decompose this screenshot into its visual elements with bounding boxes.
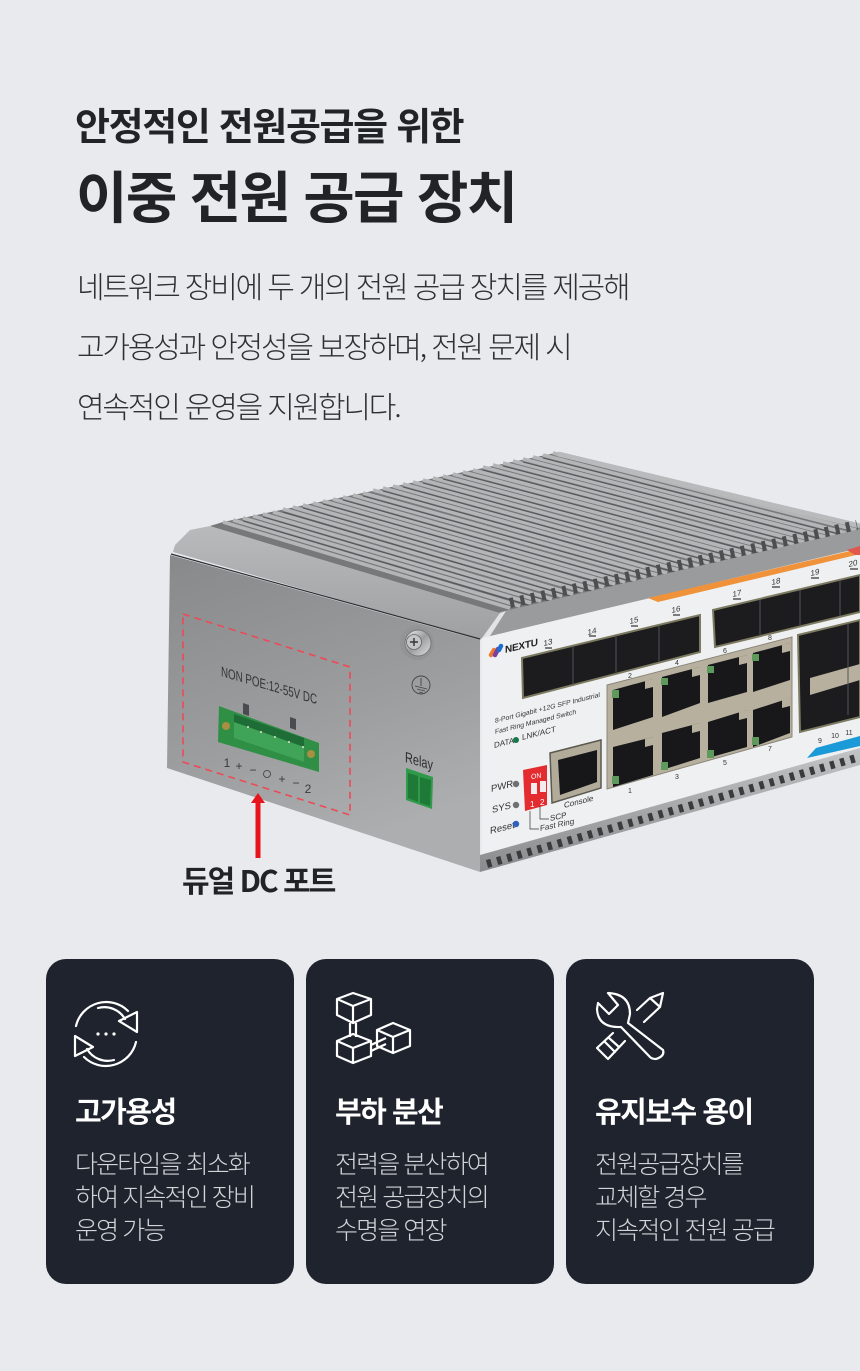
SFP ports 13-16: 16 bbox=[672, 604, 681, 615]
SFP ports 9-12 block: 10 bbox=[831, 733, 839, 740]
text: load balancing: 전력을 분산하여 bbox=[335, 1145, 488, 1181]
terminal labels: + bbox=[235, 759, 243, 773]
RJ45 port block: 1 bbox=[628, 788, 632, 795]
status LEDs: SYS bbox=[492, 800, 511, 816]
voltage label: NON POE:12-55V DC bbox=[221, 664, 317, 708]
DIP switch: ON bbox=[531, 773, 541, 781]
bottom vent strip bbox=[480, 748, 860, 872]
grounding screw bbox=[400, 626, 434, 660]
icon: connected cubes bbox=[336, 992, 412, 1064]
SFP ports 13-16: 14 bbox=[588, 626, 597, 637]
model text: Fast Ring Managed Switch bbox=[495, 709, 576, 736]
RJ45 port block: 3 bbox=[675, 774, 679, 781]
text: load balancing: 전원 공급장치의 bbox=[335, 1178, 488, 1214]
DIP switch: 2 bbox=[540, 798, 545, 807]
terminal labels bbox=[224, 756, 312, 796]
console port: Console bbox=[564, 794, 594, 810]
RJ45 port block bbox=[607, 635, 792, 795]
callout label: dual DC port: 듀얼 DC 포트 bbox=[182, 857, 334, 901]
model text: 8-Port Gigabit +12G SFP Industrial bbox=[495, 692, 600, 725]
text block: description: 고가용성과 안정성을 보장하며, 전원 문제 시 bbox=[77, 323, 571, 367]
red arrow bbox=[251, 793, 265, 858]
orange stripe bbox=[648, 551, 856, 602]
text: easy maintenance: 교체할 경우 bbox=[595, 1178, 706, 1214]
text: easy maintenance: 지속적인 전원 공급 bbox=[595, 1211, 774, 1247]
DIP switch: SCP bbox=[550, 811, 566, 823]
heading: high availability: 고가용성 bbox=[75, 1089, 176, 1131]
top surface with cooling fins bbox=[210, 452, 860, 638]
SFP ports 17-20: 20 bbox=[849, 558, 858, 569]
heading: main title: 이중 전원 공급 장치 bbox=[76, 154, 516, 235]
ground symbol bbox=[412, 676, 430, 694]
text block: description: 연속적인 운영을 지원합니다. bbox=[77, 383, 400, 427]
status LEDs: PWR bbox=[491, 779, 513, 795]
DC power connector bbox=[218, 703, 319, 772]
model text: LNK/ACT bbox=[522, 725, 556, 742]
SFP ports 17-20: 18 bbox=[772, 576, 781, 587]
SFP ports 9-12 block: 9 bbox=[818, 738, 822, 745]
console port bbox=[550, 740, 601, 810]
relay label: Relay bbox=[405, 749, 433, 774]
text: high availability bbox=[75, 1145, 254, 1247]
SFP ports 13-16: 13 bbox=[544, 637, 553, 648]
terminal labels: − bbox=[249, 763, 257, 777]
text: high availability: 운영 가능 bbox=[75, 1211, 165, 1247]
dashed highlight around DC port bbox=[183, 614, 350, 815]
RJ45 port block: 5 bbox=[723, 760, 727, 767]
heading: easy maintenance: 유지보수 용이 bbox=[595, 1089, 753, 1131]
SFP ports 17-20 bbox=[713, 558, 860, 647]
icon: wrench and pencil bbox=[596, 992, 664, 1060]
SFP ports 9-12 block: 11 bbox=[845, 730, 853, 737]
logo: NEXTU bbox=[505, 637, 538, 656]
RJ45 port block: 2 bbox=[628, 673, 632, 680]
terminal labels: − bbox=[292, 776, 300, 790]
status LEDs: Reset bbox=[490, 820, 515, 837]
RJ45 port block: 7 bbox=[768, 746, 772, 753]
DIP switch: 1 bbox=[530, 800, 535, 809]
SFP ports 17-20: 19 bbox=[811, 567, 820, 578]
RJ45 port block: 8 bbox=[768, 635, 772, 642]
text: load balancing bbox=[335, 1145, 488, 1247]
DIP switch bbox=[523, 765, 574, 833]
text: easy maintenance bbox=[595, 1145, 774, 1247]
text block: description bbox=[77, 263, 628, 427]
terminal labels: 2 bbox=[305, 782, 312, 796]
panel: load balancing bbox=[306, 959, 554, 1284]
SFP ports 13-16: 15 bbox=[630, 615, 639, 626]
RJ45 port block: 6 bbox=[723, 648, 727, 655]
DIP switch: Fast Ring bbox=[540, 817, 574, 833]
text: high availability: 다운타임을 최소화 bbox=[75, 1145, 249, 1181]
panel: easy maintenance bbox=[566, 959, 814, 1284]
RJ45 port block: 4 bbox=[675, 660, 679, 667]
text: load balancing: 수명을 연장 bbox=[335, 1211, 446, 1247]
blue stripe bbox=[807, 736, 860, 758]
product illustration: industrial switch bbox=[167, 451, 860, 872]
SFP ports 13-16 bbox=[522, 604, 700, 698]
heading: load balancing: 부하 분산 bbox=[335, 1089, 442, 1131]
panel: high availability bbox=[46, 959, 294, 1284]
relay connector bbox=[406, 768, 433, 809]
front panel bbox=[480, 546, 860, 872]
status LEDs bbox=[490, 779, 519, 837]
icon: refresh cycle bbox=[74, 1000, 138, 1068]
model text: DATA bbox=[494, 736, 515, 750]
terminal labels: 1 bbox=[224, 756, 231, 770]
top chamfer bbox=[173, 526, 500, 640]
text block: description: 네트워크 장비에 두 개의 전원 공급 장치를 제공해 bbox=[77, 263, 628, 307]
SFP ports 9-12 block bbox=[798, 620, 860, 745]
terminal labels: + bbox=[278, 772, 286, 786]
corner accent bbox=[847, 546, 860, 555]
left face bbox=[167, 555, 480, 872]
heading: subtitle: 안정적인 전원공급을 위한 bbox=[75, 96, 463, 151]
text: easy maintenance: 전원공급장치를 bbox=[595, 1145, 743, 1181]
model text bbox=[494, 692, 600, 750]
SFP ports 17-20: 17 bbox=[733, 588, 742, 599]
text: high availability: 하여 지속적인 장비 bbox=[75, 1178, 254, 1214]
